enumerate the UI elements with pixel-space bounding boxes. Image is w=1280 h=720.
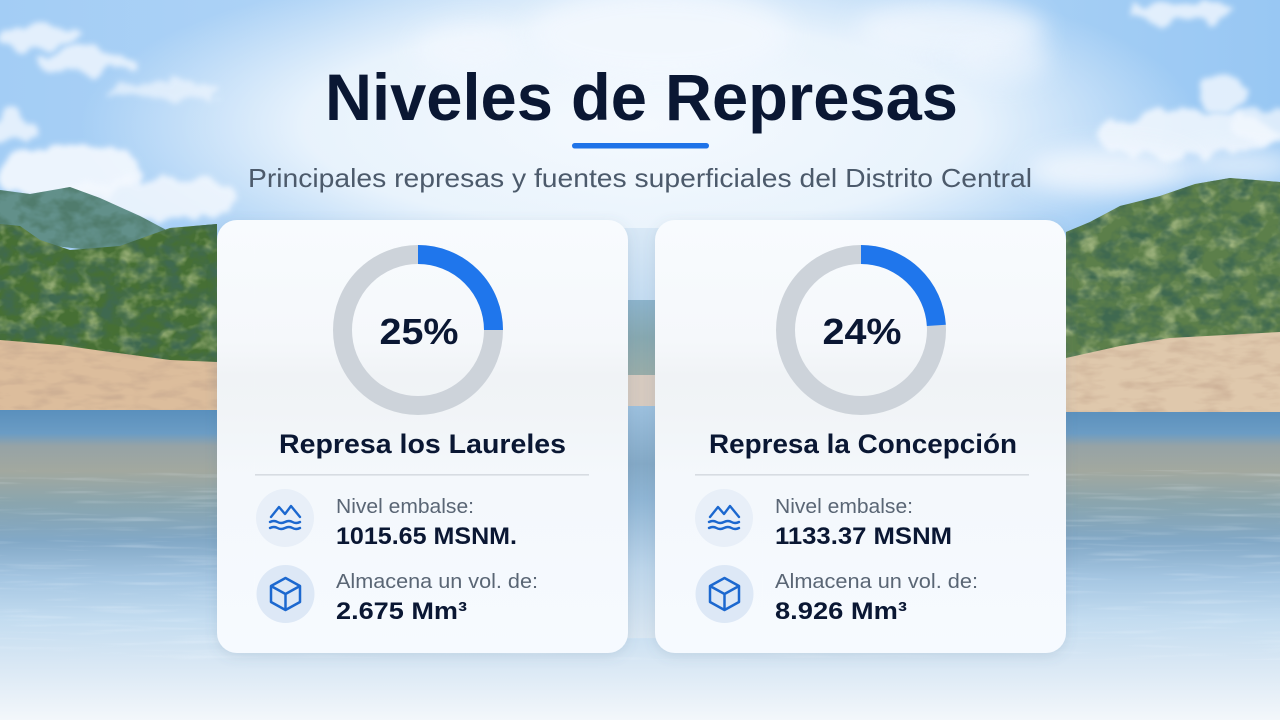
subtitle: Principales represas y fuentes superficiales del Distrito Central	[248, 163, 1032, 193]
title: Niveles de Represas	[325, 60, 958, 134]
reservoir level: 1133.37 MSNM	[775, 523, 952, 550]
near forested hill left	[0, 224, 217, 362]
reservoir level: Nivel embalse:	[775, 496, 913, 518]
stored volume: Almacena un vol. de:	[775, 571, 978, 593]
exposed bank left	[0, 340, 217, 410]
exposed bank right	[1060, 330, 1280, 415]
reservoir level: Nivel embalse:	[336, 496, 474, 518]
icon: mountains and water	[695, 489, 753, 547]
panel: Represa la Concepción	[655, 220, 1066, 653]
stored volume	[775, 571, 978, 625]
donut chart: 25%	[342, 254, 494, 406]
title underline	[572, 143, 709, 148]
panel: Represa los Laureles	[217, 220, 628, 653]
centre gap between the cards: hazy view	[620, 228, 665, 638]
donut chart: 24%: 24%	[822, 311, 902, 352]
dam name: Represa la Concepción	[709, 429, 1017, 459]
stored volume	[336, 571, 538, 625]
forested hill right	[1066, 178, 1280, 358]
stored volume: 2.675 Mm³	[336, 598, 467, 625]
stored volume: Almacena un vol. de:	[336, 571, 538, 593]
icon: cube	[256, 565, 314, 623]
water ripples	[0, 470, 1280, 660]
reservoir level	[336, 496, 517, 550]
icon: cube	[696, 565, 754, 623]
far hill left	[0, 187, 166, 249]
reservoir level	[775, 496, 952, 550]
clouds	[0, 0, 1280, 218]
donut chart: 24%	[786, 254, 936, 406]
stored volume: 8.926 Mm³	[775, 598, 907, 625]
water	[0, 405, 1280, 720]
reservoir level: 1015.65 MSNM.	[336, 523, 517, 550]
icon: mountains and water	[256, 489, 314, 547]
central sky glow	[80, 0, 1200, 295]
donut chart: 25%: 25%	[380, 311, 458, 352]
card background	[217, 220, 628, 653]
card background	[655, 220, 1066, 653]
dam name: Represa los Laureles	[279, 429, 566, 459]
sky	[0, 0, 1280, 300]
